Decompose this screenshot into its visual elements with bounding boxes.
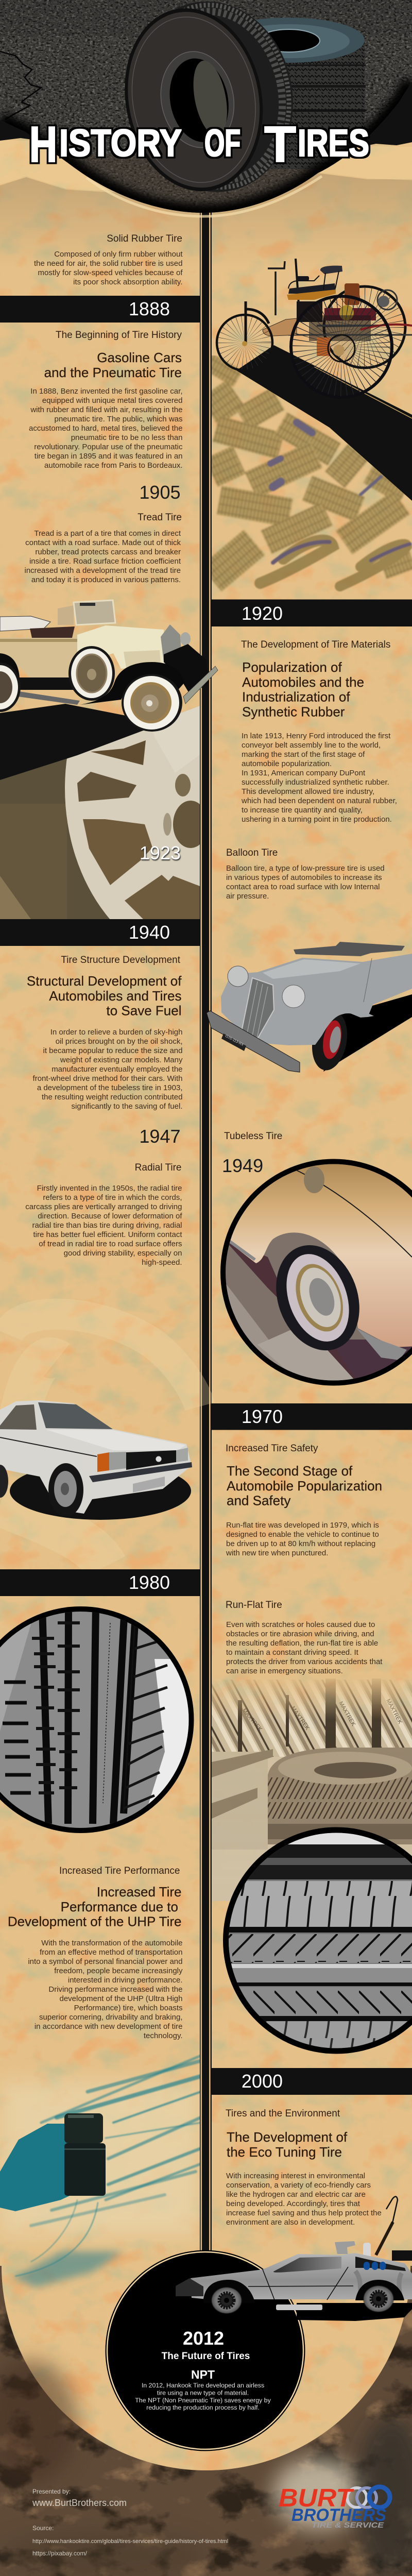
grooves: [42, 1606, 135, 1824]
beginning of tire history block: and the Pneumatic Tire: [44, 365, 182, 380]
body stripe: [0, 1437, 97, 1456]
year bar 1940: 1940: [129, 922, 170, 943]
sepia tire: [268, 1748, 412, 1844]
beginning of tire history block: pneumatic tire to be no less than: [71, 433, 182, 442]
year bar 1970: 1970: [242, 1406, 283, 1427]
tire structure block: a development of the tubeless tire in 1903,: [37, 1083, 182, 1092]
left sidewall: [0, 1606, 36, 1731]
white ground: [139, 1659, 196, 1834]
run-flat tire block: [226, 1600, 383, 1675]
radial tire 1947 block: high-speed.: [142, 1258, 182, 1267]
tire structure block: weight of existing car models. Many: [60, 1056, 183, 1064]
trim line: [297, 1171, 412, 1258]
development of tire materials block: Synthetic Rubber: [242, 704, 345, 719]
radial tire 1947 block: good driving stability, especially on: [64, 1249, 182, 1258]
tread tire 1905 block: [24, 482, 182, 584]
rib: [221, 1964, 412, 1982]
badge: [156, 1456, 162, 1462]
increased tire safety block: with new tire when punctured.: [226, 1549, 328, 1557]
performance block: Increased Tire Performance: [59, 1866, 180, 1876]
chassis black: [15, 677, 82, 690]
door line: [364, 958, 372, 1002]
increased tire safety block: Run-flat tire was developed in 1979, which is: [226, 1521, 379, 1530]
wheel: [48, 1463, 83, 1517]
rear wheel: [0, 1465, 8, 1498]
beginning of tire history block: tire began in 1895 and it was featured in an: [35, 452, 182, 461]
solid rubber tire block: Composed of only firm rubber without: [54, 250, 183, 259]
run-flat tire block: to maintain a constant driving speed. It: [226, 1648, 359, 1657]
2012 caption: reducing the production process by half.: [146, 2404, 260, 2411]
title: T: [264, 116, 296, 173]
2012 caption: 2012: [183, 2328, 224, 2349]
car body: [191, 2253, 412, 2299]
car shadow: [323, 994, 412, 1072]
development of tire materials block: In 1931, American company DuPont: [242, 769, 366, 777]
balloon tire block: air pressure.: [226, 892, 269, 901]
development of tire materials block: automobile popularization.: [242, 759, 332, 768]
black road diagonal: [236, 345, 412, 501]
2012 caption: NPT: [191, 2368, 215, 2381]
wrapped tire rows: [212, 1680, 412, 1757]
right headlamp: [282, 985, 305, 1008]
radial tire 1947 block: Radial Tire: [135, 1162, 181, 1173]
2012 caption: [135, 2328, 271, 2411]
top dark band: [221, 1829, 412, 1844]
radial tire 1947 block: Firstly invented in the 1950s, the radial tire: [37, 1184, 182, 1193]
chevron row one: [221, 1934, 412, 1963]
fine sipe dots: [103, 1623, 110, 1803]
tire structure block: front-wheel drive method for their cars. With: [33, 1074, 182, 1083]
performance block: from an effective method of transportation: [40, 1948, 182, 1957]
grille: [126, 1450, 176, 1470]
grey convertible car: OJS-113-RX: [225, 1035, 244, 1047]
year bar 1970: [212, 1403, 412, 1430]
rear windshield panels: [58, 605, 74, 625]
cable hook: [376, 2222, 393, 2255]
tire structure block: manufacturer eventually employed the: [52, 1065, 182, 1074]
mirror: [304, 1166, 324, 1193]
tires and environment block: like the hydrogen car and electric car are: [226, 2190, 366, 2199]
sepia stacked tires photo: [212, 1674, 412, 1901]
tires and environment block: environment are also in development.: [226, 2218, 355, 2227]
tire structure block: oil prices brought on by the oil shock,: [56, 1037, 182, 1046]
front wheel: [122, 674, 182, 732]
development of tire materials block: successfully industrialized synthetic rubber.: [242, 778, 389, 787]
teal tire tracks photo: [0, 2056, 201, 2287]
front fender: [80, 662, 184, 705]
radial tire 1947 block: [25, 1126, 182, 1267]
performance block: Performance due to: [61, 1899, 178, 1914]
increased tire safety block: Increased Tire Safety: [226, 1443, 318, 1454]
year bar 2000: 2000: [242, 2071, 283, 2092]
performance block: Development of the UHP Tire: [8, 1914, 181, 1929]
blue lights: [364, 2262, 386, 2270]
increased tire safety block: be driven up to at 80 km/h without replacing: [226, 1539, 375, 1548]
tires and environment block: Tires and the Environment: [226, 2108, 340, 2119]
beginning of tire history block: pneumatic tire. The public, which was: [54, 415, 182, 423]
performance block: Increased Tire: [97, 1884, 181, 1900]
development of tire materials block: conveyor belt assembly line to the world,: [242, 741, 381, 750]
presented by credits: [32, 2488, 228, 2557]
folded top: [294, 942, 405, 956]
logo tire icons: [347, 2487, 390, 2507]
headlamp: [109, 1452, 126, 1470]
solid rubber tire block: the need for air, the solid rubber tire is used: [34, 259, 182, 268]
balloon tire block: Balloon tire, a type of low-pressure tire is used: [226, 864, 385, 873]
hero edge shade: [0, 81, 412, 213]
radial tire 1947 block: tire has better fuel efficient. Uniform contact: [33, 1230, 182, 1239]
tires and environment block: increase fuel saving and thus help protect the: [226, 2209, 382, 2217]
grille: [239, 978, 274, 1043]
performance block: freedom, people became increasingly: [54, 1967, 183, 1975]
tubeless tire label: Tubeless Tire: [224, 1131, 282, 1142]
solid rubber tire block: Solid Rubber Tire: [107, 233, 182, 244]
cream vintage car: [0, 600, 218, 732]
hero: cream arc under circle: [87, 176, 322, 216]
development of tire materials block: [241, 639, 397, 824]
wrapper lettering: MAXTREK: [337, 1700, 357, 1727]
run-flat tire block: the resulting deflation, the run-flat tire is able: [226, 1639, 378, 1648]
middle wheel: [68, 646, 115, 701]
left headlamp: [228, 966, 248, 987]
oval photo: horizontal tread: [221, 1824, 412, 2062]
faded tire watermark: [0, 1314, 200, 1566]
Benz tricycle: [217, 259, 412, 397]
balloon tire block: [226, 848, 385, 901]
door panel: [0, 638, 78, 679]
performance block: superior cornering, drivability and braking,: [39, 2013, 182, 2022]
teal shadow blob: [0, 2124, 70, 2211]
title: [29, 116, 369, 173]
presented by credits: http://www.hankooktire.com/global/tires-services/tire-guide/history-of-tires.html: [32, 2538, 228, 2545]
solid rubber tire block: mostly for slow-speed vehicles because of: [38, 268, 183, 277]
year bar 1920: [212, 600, 412, 626]
big wheel: [291, 296, 392, 397]
development of tire materials block: Popularization of: [242, 659, 342, 675]
oval photo: tread close-up: [0, 1606, 196, 1834]
bottom row: [221, 2021, 412, 2062]
oval photo: whitewall car: [220, 1159, 412, 1386]
tire structure block: [27, 955, 183, 1111]
run-flat tire block: Run-Flat Tire: [226, 1600, 282, 1611]
tire structure block: Tire Structure Development: [61, 955, 181, 965]
2012 caption: In 2012, Hankook Tire developed an airless: [142, 2382, 264, 2389]
development of tire materials block: In late 1913, Henry Ford introduced the first: [242, 732, 391, 740]
performance block: interested in driving performance.: [68, 1976, 182, 1985]
performance block: With the transformation of the automobile: [41, 1939, 182, 1947]
presented by credits: https://pixabay.com/: [32, 2550, 87, 2557]
windshield: [38, 1402, 113, 1429]
2012 caption: tire using a new type of material.: [157, 2389, 249, 2396]
tire tracks illustration: [199, 353, 412, 591]
tread tire 1905 block: inside a tire. Road surface friction coefficient: [29, 557, 181, 566]
beginning of tire history block: equipped with unique metal tires covered: [42, 396, 182, 405]
run-flat tire block: protects the driver from various accidents that: [226, 1657, 383, 1666]
increased tire safety block: [226, 1443, 382, 1557]
floor stones: [226, 1284, 294, 1373]
block row: [221, 1881, 412, 1928]
side window: [0, 1404, 37, 1430]
darker parchment band under the hero: [0, 140, 412, 268]
solid rubber tire block: its poor shock absorption ability.: [73, 278, 182, 286]
development of tire materials block: which had been dependent on natural rubber,: [241, 796, 397, 805]
wrapper lettering: MAXTREK: [385, 1698, 403, 1725]
tire stack: [255, 18, 366, 169]
performance block: Performance) tire, which boasts: [74, 2004, 182, 2012]
Burt Brothers logo: [279, 2484, 390, 2530]
wrapper lettering: MAXTREK: [290, 1705, 311, 1732]
year bar 1888: [0, 296, 200, 323]
footer grunge background: [0, 2266, 412, 2576]
interior: [30, 626, 75, 638]
beginning of tire history block: accustomed to hard, metal tires, believed the: [29, 424, 182, 433]
radiator chrome: [161, 624, 181, 662]
increased tire safety block: The Second Stage of: [227, 1463, 353, 1479]
presented by credits: Source:: [32, 2524, 54, 2532]
lower teal shadow: [13, 2251, 124, 2287]
front bumper chrome: [356, 1328, 407, 1360]
1923 label: 1923: [140, 842, 181, 863]
tires and environment block: With increasing interest in environmental: [226, 2172, 365, 2180]
tread grooves: [238, 1679, 381, 1752]
radial tire 1947 block: of tread in radial tire to road surface offers: [39, 1240, 182, 1248]
beginning of tire history block: In 1888, Benz invented the first gasoline car,: [30, 387, 182, 396]
1923 wheel photo: [0, 706, 200, 919]
tread tire 1905 block: Tread Tire: [138, 512, 182, 523]
tire structure block: In order to relieve a burden of sky-high: [50, 1028, 182, 1037]
radial tire 1947 block: refers to a type of tire in which the cords,: [43, 1193, 182, 1202]
tire structure block: significantly to the saving of fuel.: [72, 1102, 182, 1111]
performance block: into a symbol of personal financial power and: [28, 1957, 182, 1966]
performance block: in accordance with new development of tire: [35, 2022, 182, 2031]
body frame and boiler: [288, 283, 412, 356]
number plate: [133, 1477, 165, 1493]
lower wrapped tires: [212, 1752, 268, 1850]
cable wire: [386, 2196, 398, 2223]
rear wheel: [324, 286, 405, 368]
performance block: Driving performance increased with the: [48, 1985, 182, 1994]
tire structure block: it became popular to reduce the size and: [43, 1046, 182, 1055]
beginning of tire history block: revolutionary. Popular use of the pneumatic: [34, 443, 183, 451]
rear chrome: [229, 1241, 255, 1260]
right ribs: [124, 1641, 167, 1808]
wrapper lettering: MAXTREK: [241, 1707, 264, 1733]
year bar 1980: 1980: [129, 1572, 170, 1593]
development of tire materials block: ushering in a turning point in tire production.: [242, 815, 392, 824]
steering column and crank: [268, 261, 285, 315]
solid rubber tire block: [34, 233, 183, 286]
tires and environment block: the Eco Tuning Tire: [227, 2144, 342, 2160]
Burt Brothers logo: TIRE & SERVICE: [312, 2521, 384, 2530]
radial tire 1947 block: direction. Because of lower deformation of: [38, 1212, 182, 1221]
year bar 1980: [0, 1569, 200, 1596]
increased tire safety block: Automobile Popularization: [227, 1478, 382, 1494]
ground shadow: [297, 2303, 412, 2321]
timeline centre strip: [200, 206, 212, 2257]
wooden floor: [263, 318, 297, 336]
foreground tire: [125, 1, 293, 192]
indicator: [97, 1452, 109, 1472]
body: [221, 954, 412, 1045]
rear wheel: [0, 663, 21, 712]
ground shadow: [10, 1462, 191, 1520]
tire structure block: the resulting weight reduction contributed: [42, 1093, 182, 1101]
increased tire safety block: designed to enable the vehicle to continue to: [226, 1530, 379, 1539]
development of tire materials block: The Development of Tire Materials: [241, 639, 390, 650]
run-flat tire block: can arise in emergency situations.: [226, 1667, 343, 1675]
development of tire materials block: marking the start of the first stage of: [242, 750, 365, 759]
rear fender: [0, 653, 20, 685]
wrapper lettering: [241, 1698, 403, 1733]
title: IRES: [298, 122, 369, 164]
chevron row two: [221, 1987, 412, 2016]
purple highlights and tire curls: [260, 422, 410, 586]
hero: torn black band: [0, 0, 412, 149]
2012 caption: The Future of Tires: [162, 2351, 250, 2362]
title: OF: [204, 122, 241, 164]
rear louvers: [176, 2278, 203, 2296]
hero: asphalt circle with tires: [0, 0, 412, 222]
2012 circle: [105, 2250, 305, 2451]
year bar 1940: [0, 919, 200, 946]
tire structure block: to Save Fuel: [107, 1003, 181, 1019]
presented by credits: Presented by:: [32, 2488, 71, 2495]
front black assembly: [164, 644, 209, 696]
wheel: [276, 1245, 359, 1351]
development of tire materials block: This development allowed tire industry,: [242, 787, 374, 796]
development of tire materials block: Automobiles and the: [242, 674, 364, 690]
performance block: technology.: [144, 2031, 182, 2040]
folded roof: [0, 616, 50, 631]
top-view car: [64, 2113, 106, 2196]
run-flat tire block: Even with scratches or holes caused due to: [226, 1620, 375, 1629]
year 1949: 1949: [222, 1155, 263, 1176]
bumper: [183, 666, 218, 704]
windshield: [74, 600, 115, 625]
door lines: [248, 2267, 353, 2300]
tread tire 1905 block: increased with a development of the tread tire: [24, 566, 181, 575]
maroon floor shadow: [229, 1243, 355, 1379]
tires and environment block: being developed. Accordingly, tires that: [226, 2199, 360, 2208]
beginning of tire history block: [29, 330, 183, 470]
DeLorean car: [176, 2196, 412, 2321]
wheel: [307, 1008, 352, 1073]
beginning of tire history block: with rubber and filled with air, resulting in the: [30, 405, 182, 414]
upright pole: [296, 259, 300, 319]
hood: [77, 625, 166, 669]
tires and environment block: [226, 2108, 382, 2227]
number plate: [221, 1033, 246, 1051]
balloon tire block: in various types of automobiles to increase its: [226, 873, 382, 882]
Burt Brothers logo: BROTHERS: [291, 2505, 386, 2525]
presented by credits: www.BurtBrothers.com: [32, 2498, 127, 2508]
beginning of tire history block: The Beginning of Tire History: [56, 330, 182, 341]
sill panel: [276, 2304, 322, 2310]
white Opel car: [0, 1400, 192, 1520]
year bar 1888: 1888: [129, 298, 170, 319]
sipes: [32, 1623, 80, 1793]
run-flat tire block: obstacles or tire abrasion while driving, and: [226, 1630, 374, 1638]
white pipes: [355, 2271, 402, 2298]
rear wheel: [363, 2285, 394, 2313]
beginning of tire history block: Gasoline Cars: [97, 350, 182, 365]
tires and environment block: conservation, a variety of eco-friendly cars: [226, 2181, 371, 2190]
performance block: [8, 1866, 183, 2040]
balloon tire block: Balloon Tire: [226, 848, 278, 858]
2012 caption: The NPT (Non Pneumatic Tire) saves energy by: [135, 2397, 271, 2404]
asphalt crack: [0, 52, 41, 120]
tread tire 1905 block: and today it is produced in various patterns.: [31, 575, 181, 584]
radial tire 1947 block: 1947: [139, 1126, 180, 1147]
development of tire materials block: Industrialization of: [242, 689, 350, 705]
grille stripes: [246, 981, 268, 1041]
increased tire safety block: and Safety: [227, 1493, 290, 1509]
beginning of tire history block: automobile race from Paris to Bordeaux.: [44, 461, 182, 470]
hood vents: [124, 650, 161, 668]
hood highlight: [46, 1430, 185, 1450]
grey convertible car: [207, 942, 412, 1073]
radial tire 1947 block: carcass plies are vertically arranged to driving: [25, 1202, 182, 1211]
black vent: [355, 2257, 406, 2271]
balloon tire block: contact area to road surface with low Internal: [226, 883, 380, 891]
title: ISTORY: [59, 122, 182, 164]
tires and environment block: The Development of: [227, 2129, 348, 2145]
wheel rim and spokes: [65, 706, 200, 919]
black wedge under cream car: [0, 704, 154, 780]
tire structure block: Structural Development of: [27, 973, 182, 989]
wheel arches: [203, 2280, 255, 2303]
year bar 2000: [212, 2068, 412, 2095]
tread tire 1905 block: rubber, tread protects carcass and breaker: [35, 548, 181, 556]
fender front: [288, 1005, 374, 1045]
seat: [287, 266, 342, 300]
car body: [221, 1159, 412, 1347]
title: H: [29, 116, 57, 173]
tread tire 1905 block: 1905: [139, 482, 180, 503]
bumper: [89, 1462, 192, 1482]
right headlamp: [176, 1448, 188, 1462]
rear flux top: [335, 2241, 355, 2254]
tire structure block: Automobiles and Tires: [49, 988, 181, 1004]
performance block: development of the UHP (Ultra High: [59, 1994, 182, 2003]
front wheel: [211, 2286, 243, 2314]
bumper: [207, 1011, 300, 1072]
front wheel: [217, 301, 272, 370]
window: [273, 2257, 341, 2273]
running board: [18, 691, 80, 705]
development of tire materials block: to increase tire quantity and quality,: [242, 806, 363, 815]
Burt Brothers logo: BURT: [279, 2484, 354, 2512]
year bar 1920: 1920: [242, 603, 283, 624]
tread tire 1905 block: contact with a road surface. Made out of thick: [25, 538, 181, 547]
body: [0, 1400, 192, 1514]
radial tire 1947 block: radial tire than bias tire during driving, radial: [32, 1221, 182, 1230]
tread tire 1905 block: Tread is a part of a tire that comes in direct: [34, 529, 181, 538]
